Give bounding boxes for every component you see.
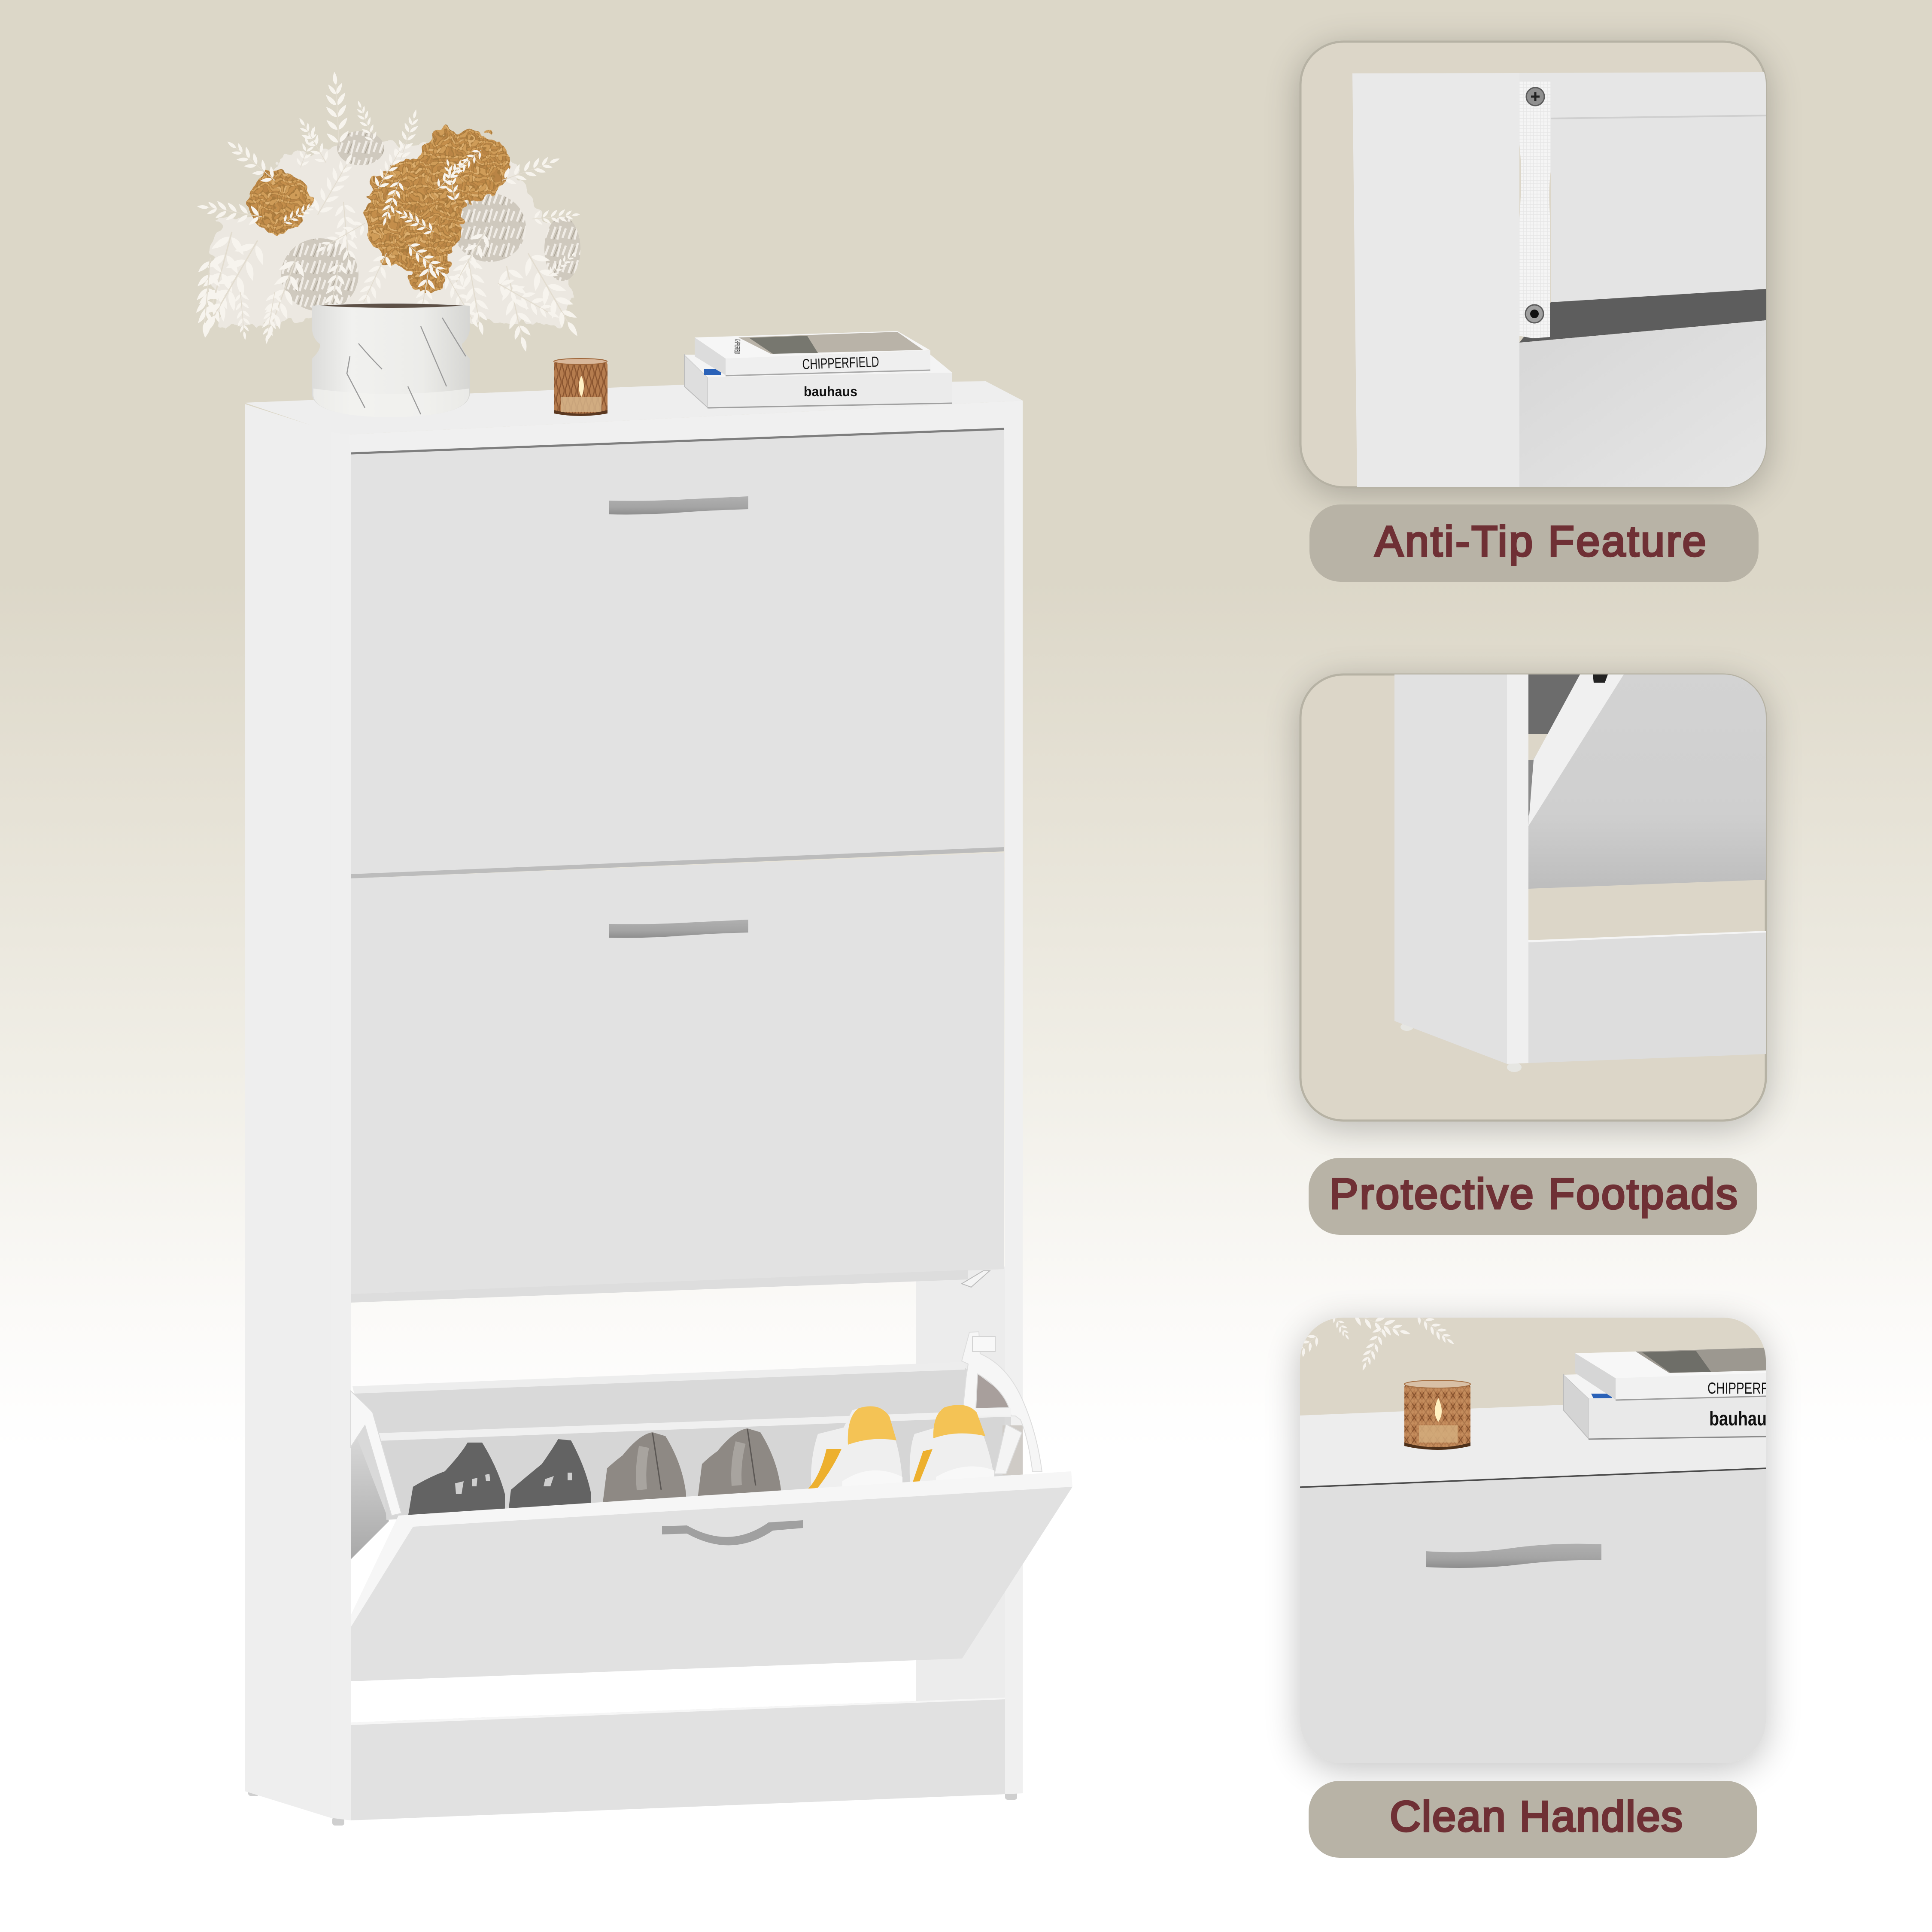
plinth base board <box>351 1698 1005 1820</box>
decor: marble vase <box>312 303 470 417</box>
left hinge bracket <box>351 1391 401 1516</box>
decor: amber candle <box>554 358 608 416</box>
lower grommet <box>1525 305 1543 323</box>
lower edge of middle door <box>351 1270 968 1303</box>
label: Clean Handles: Clean Handles <box>1390 1792 1683 1841</box>
label: Protective Footpads <box>1309 1158 1757 1235</box>
cabinet feet <box>248 1788 1017 1826</box>
lower panel <box>1519 320 1766 487</box>
tilted door face <box>351 1487 1072 1681</box>
dark gap under door <box>1519 289 1766 343</box>
shoes: dark pair <box>407 1439 591 1520</box>
door <box>1551 115 1766 302</box>
open bottom drawer <box>351 1332 1072 1681</box>
foliage mass <box>210 144 573 326</box>
label: Anti-Tip Feature: Anti-Tip Feature <box>1375 517 1706 565</box>
upper drawer door <box>351 429 1004 875</box>
leaves <box>1276 1303 1459 1374</box>
plinth board <box>1528 932 1766 1063</box>
shoes: white and yellow sneakers <box>807 1405 994 1490</box>
panel: anti-tip feature detail <box>1300 42 1766 487</box>
rear shelf lip <box>352 1362 965 1394</box>
gap between upper doors <box>351 847 1004 878</box>
upper book <box>1575 1348 1795 1400</box>
lower book: bauhaus <box>804 384 857 399</box>
label: Anti-Tip Feature <box>1309 504 1759 582</box>
door face <box>1300 1468 1766 1763</box>
upper book: CHIPPERFIELD <box>1707 1379 1795 1397</box>
anti-tip strap <box>1519 82 1551 338</box>
lower book <box>684 355 952 408</box>
inner left shadow <box>351 1422 389 1559</box>
cabinet side panel <box>245 404 331 1818</box>
front top rail <box>349 401 1023 456</box>
upper book <box>695 331 930 376</box>
cabinet side <box>1394 674 1507 1064</box>
underside of open door <box>1528 674 1766 889</box>
right upright <box>1004 401 1023 1794</box>
decor: flower bouquet <box>186 71 591 355</box>
grey inner sliver <box>1528 760 1534 816</box>
inner tray panel <box>380 1417 1005 1520</box>
beige gap behind bracket <box>1528 734 1551 760</box>
lower book: bauhaus <box>1709 1407 1776 1430</box>
right hinge bracket <box>962 1332 1042 1475</box>
dark drawer interior <box>1528 674 1584 734</box>
panel: clean handles detail <box>1276 1303 1795 1763</box>
door top edge <box>351 1471 1072 1627</box>
upper book: CHIPPERFIELD <box>802 354 879 373</box>
white door edge <box>1528 674 1624 826</box>
main product: white shoe cabinet <box>245 381 1072 1826</box>
decor: stacked books <box>684 331 952 408</box>
shoes: taupe pair <box>603 1428 781 1503</box>
golden seed clusters <box>247 129 511 292</box>
white leaf sprigs <box>186 71 591 355</box>
lower book <box>1564 1370 1776 1439</box>
upper book: CHIPPERFIELD <box>733 339 742 354</box>
top screw <box>1526 88 1544 106</box>
upper door handle <box>609 496 748 514</box>
panel: protective footpads detail <box>1300 674 1766 1121</box>
right back panel in open section <box>916 1267 1005 1701</box>
open door handle <box>662 1520 803 1545</box>
front edge <box>1507 674 1528 1064</box>
candle <box>1404 1380 1470 1450</box>
middle door handle <box>609 920 748 938</box>
handle <box>1426 1544 1601 1568</box>
cabinet top surface <box>1300 1395 1766 1487</box>
grey plume clusters <box>281 131 580 311</box>
middle drawer door <box>351 853 1004 1294</box>
label: Clean Handles <box>1309 1781 1757 1858</box>
top rail <box>1519 72 1766 119</box>
middle door hinge <box>962 1271 990 1287</box>
cabinet top surface <box>245 381 1023 434</box>
side panel <box>1352 73 1519 487</box>
footpads <box>1400 1023 1522 1072</box>
front edge of left upright <box>331 431 351 1820</box>
drawer interior back panel <box>354 1367 1011 1520</box>
label: Protective Footpads: Protective Footpads <box>1330 1170 1738 1218</box>
inner rail <box>379 1410 1011 1441</box>
small dark hinge <box>1593 674 1608 683</box>
